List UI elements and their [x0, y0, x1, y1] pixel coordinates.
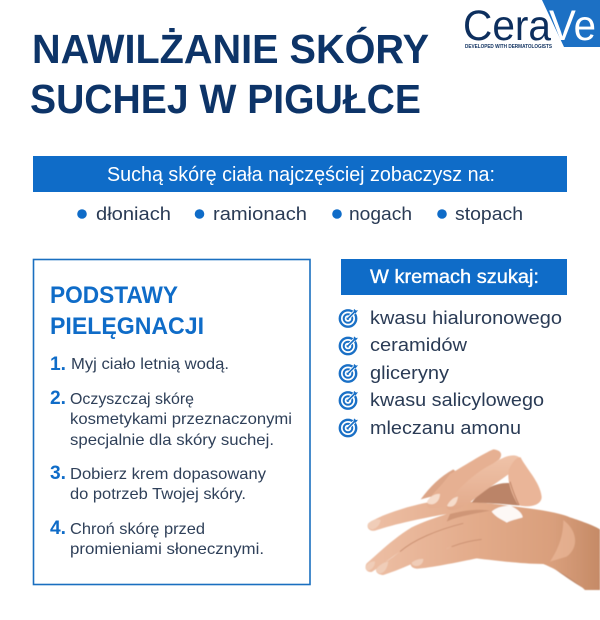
location: ramionach: ramionach [213, 203, 307, 224]
logo wordmark Ve: Ve [549, 2, 596, 50]
step 3 text: Dobierz krem dopasowany [70, 466, 266, 483]
step 4: 4. [50, 518, 66, 539]
cream [492, 506, 523, 523]
location: dłoniach: dłoniach [96, 203, 171, 224]
step 3 text: do potrzeb Twojej skóry. [70, 486, 246, 503]
ingredient 4: kwasu salicylowego [370, 389, 544, 410]
step 1 text: Myj ciało letnią wodą. [71, 356, 229, 373]
panel heading [50, 282, 204, 340]
location: nogach: nogach [349, 203, 412, 224]
illustration: hands applying cream [365, 449, 600, 590]
panel heading: PODSTAWY [50, 282, 178, 309]
top hand finger B [447, 455, 521, 510]
top hand finger A [427, 449, 501, 508]
banner: where dry skin appears [33, 156, 567, 192]
ingredient 5: mleczanu amonu [370, 417, 521, 438]
logo wordmark Cera: Cera [463, 2, 551, 50]
step 2 text [70, 391, 292, 449]
panel: care basics [34, 260, 310, 584]
top hand palm shadow [472, 483, 532, 506]
heading line 2: PIELĘGNACJI [50, 313, 204, 340]
step 2: 2. [50, 388, 66, 409]
step 3 text [70, 466, 266, 503]
title [30, 26, 429, 122]
banner: look for in creams [341, 259, 567, 295]
step 4 [50, 518, 264, 558]
top hand back finger [421, 469, 462, 499]
ingredients list [340, 307, 562, 438]
step 2 text: Oczyszczaj skórę [70, 391, 194, 408]
step 3: 3. [50, 463, 66, 484]
step 4 text: Chroń skórę przed [70, 521, 205, 538]
logo blue triangle [542, 0, 600, 47]
step 2 [50, 388, 292, 449]
step 1 [50, 354, 229, 375]
step 3 [50, 463, 266, 503]
location: stopach: stopach [455, 203, 523, 224]
icon: target [340, 336, 358, 354]
title line 1: NAWILŻANIE SKÓRY [32, 26, 429, 72]
icon: target [340, 364, 358, 382]
step 2 text: specjalnie dla skóry suchej. [70, 432, 274, 449]
lower hand and forearm [365, 501, 600, 590]
top hand thumb [508, 457, 542, 506]
ingredient 2: ceramidów [370, 334, 468, 355]
icon: target [340, 418, 358, 436]
icon: target [340, 309, 358, 327]
ingredient 3: gliceryny [370, 362, 450, 383]
logo: CeraVe [463, 0, 600, 50]
step 4 text: promieniami słonecznymi. [70, 541, 264, 558]
body locations list [77, 203, 523, 224]
nails [427, 494, 440, 504]
step 4 text [70, 521, 264, 558]
logo tagline: DEVELOPED WITH DERMATOLOGISTS [465, 44, 552, 50]
icon: target [340, 391, 358, 409]
banner text: W kremach szukaj: [370, 267, 539, 288]
banner text: Suchą skórę ciała najczęściej zobaczysz na: [107, 164, 495, 186]
step 2 text: kosmetykami przeznaczonymi [70, 411, 292, 428]
step 1: 1. [50, 354, 66, 375]
ingredient 1: kwasu hialuronowego [370, 307, 562, 328]
title line 2: SUCHEJ W PIGUŁCE [30, 76, 421, 122]
